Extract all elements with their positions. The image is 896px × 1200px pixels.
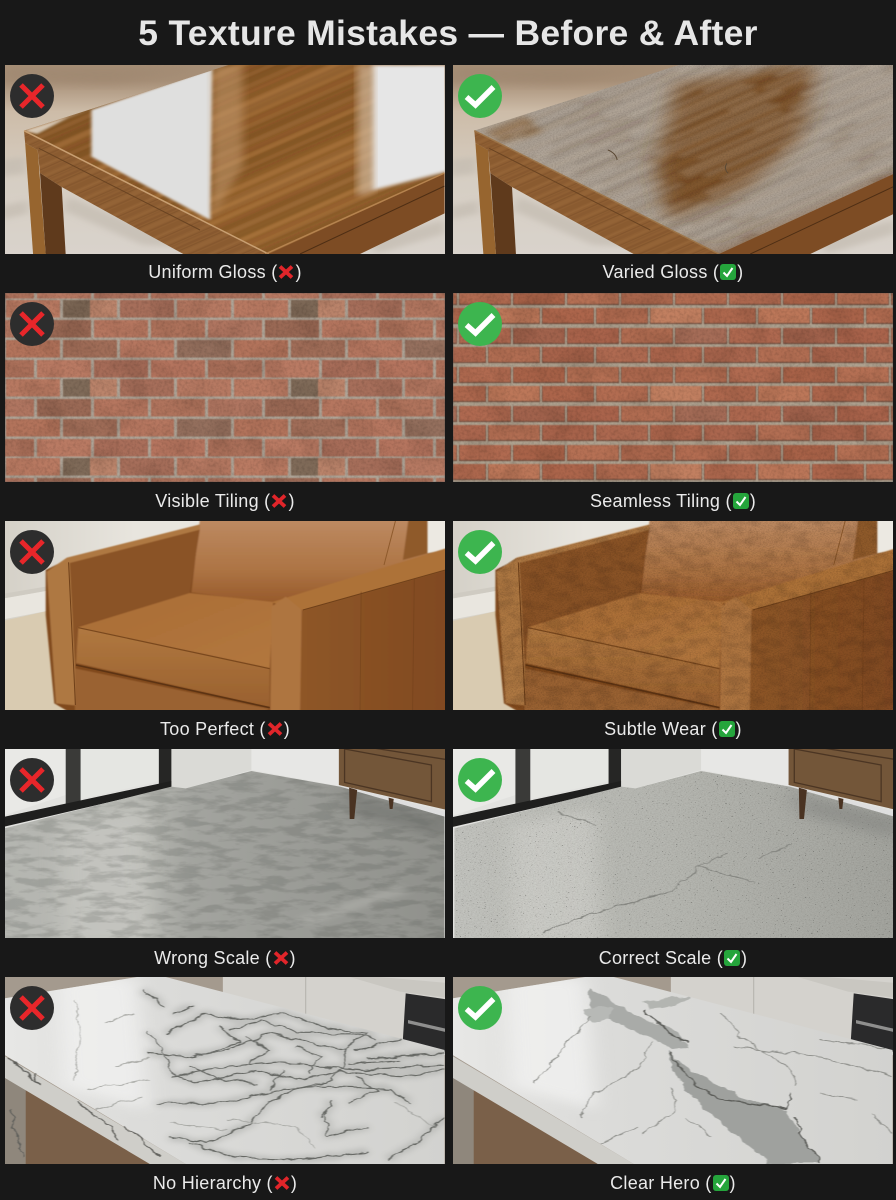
badge: red X on dark circle <box>10 530 54 574</box>
badge: green check circle <box>458 302 502 346</box>
badge: red X on dark circle <box>10 758 54 802</box>
photo: concrete floor with fine speckle and crack <box>453 749 893 938</box>
panel: seamless tiling bricks (after) <box>453 293 893 482</box>
panel: visible tiling bricks (before) <box>5 293 445 482</box>
badge: green check circle <box>458 758 502 802</box>
panel: too perfect leather chair (before) <box>5 521 445 710</box>
badge: red X on dark circle <box>10 986 54 1030</box>
panel: wrong scale concrete (before) <box>5 749 445 938</box>
photo: concrete floor with oversized pattern <box>5 749 445 938</box>
caption: seamless tiling: Seamless Tiling ( ) <box>590 491 756 511</box>
photo: marble counter with bold hero vein <box>453 977 893 1164</box>
caption: subtle wear: Subtle Wear ( ) <box>604 719 742 739</box>
panel: uniform gloss table (before) <box>5 65 445 254</box>
photo: smooth leather armchair <box>5 521 445 710</box>
panel: clear hero marble (after) <box>453 977 893 1164</box>
panel: subtle wear leather chair (after) <box>453 521 893 710</box>
caption: wrong scale: Wrong Scale ( ) <box>154 948 296 968</box>
badge: red X on dark circle <box>10 302 54 346</box>
caption: no hierarchy: No Hierarchy ( ) <box>153 1173 297 1193</box>
caption: visible tiling: Visible Tiling ( ) <box>155 491 295 511</box>
title: 5 Texture Mistakes — Before & After <box>138 13 758 53</box>
caption: uniform gloss: Uniform Gloss ( ) <box>148 262 302 282</box>
panel: correct scale concrete (after) <box>453 749 893 938</box>
photo: varied brick wall <box>453 293 893 482</box>
badge: green check circle <box>458 530 502 574</box>
photo: worn leather armchair <box>453 521 893 710</box>
panel: varied gloss table (after) <box>453 65 893 254</box>
photo: worn wooden table <box>453 65 893 254</box>
badge: red X on dark circle <box>10 74 54 118</box>
caption: varied gloss: Varied Gloss ( ) <box>603 262 743 282</box>
photo: marble counter with busy veins <box>5 977 445 1164</box>
photo: glossy wooden table <box>5 65 445 254</box>
caption: too perfect: Too Perfect ( ) <box>160 719 290 739</box>
caption: correct scale: Correct Scale ( ) <box>599 948 747 968</box>
badge: green check circle <box>458 74 502 118</box>
panel: no hierarchy marble (before) <box>5 977 445 1164</box>
caption: clear hero: Clear Hero ( ) <box>610 1173 736 1193</box>
badge: green check circle <box>458 986 502 1030</box>
photo: brick wall with repeats <box>5 293 445 482</box>
